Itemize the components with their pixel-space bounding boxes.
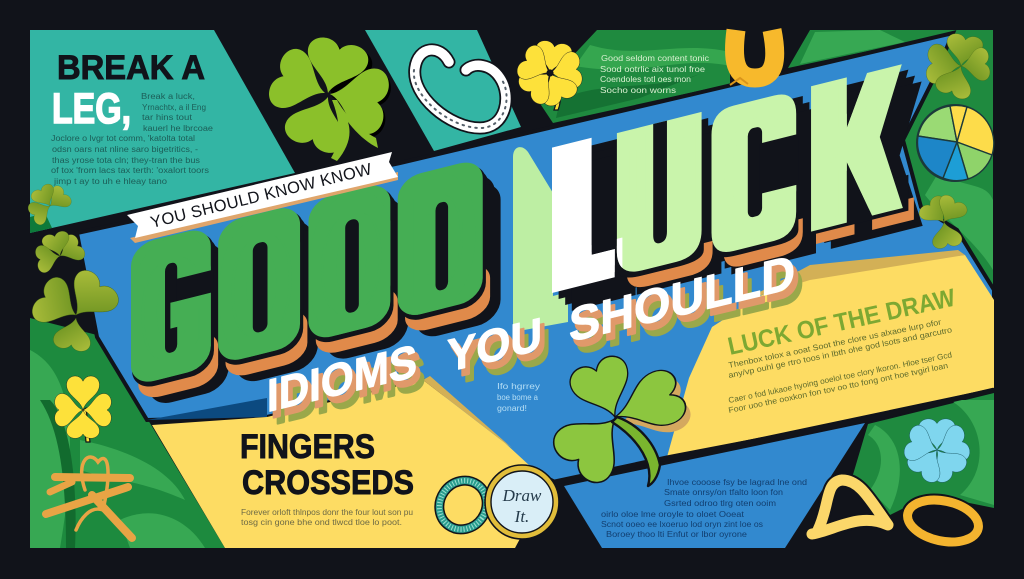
text block: centre blue (497, 382, 540, 413)
text block: centre blue: boe bome a (497, 393, 539, 402)
icon: medal with draw it: It. (514, 507, 529, 526)
icon: white horseshoe (414, 50, 507, 128)
panel: luck of the draw yellow (667, 255, 994, 457)
text block: break a leg: of tox 'from lacs tax terth: 'oxalort toors (51, 166, 209, 175)
good orange band (138, 261, 490, 402)
heading: fingers crossed: CROSSEDS (242, 464, 414, 502)
text block: lower blue: Scnot ooeo ee lxoeruo lod oryn zint loe os (601, 520, 763, 529)
heading: break a: BREAK A (57, 49, 205, 87)
panel: lower blue (564, 423, 865, 548)
text block: centre blue: gonard! (497, 404, 527, 413)
icon: big lime clover (547, 352, 695, 490)
icon: olive clovers (26, 32, 991, 353)
luck extrusion (559, 63, 923, 318)
text block: lower blue: Gsrted odroo tlrg oten ooim (664, 499, 776, 508)
chart: luck pie (917, 105, 994, 181)
text block: lower blue: oirlo oloe lme oroyle to oloet Ooeat (601, 510, 745, 519)
divider: black stripe (555, 390, 994, 482)
good dark line (132, 160, 486, 391)
text block: fingers crossed: Forever orloft thlnpos donr the four lout son pu (241, 508, 413, 517)
icon: gold ring (904, 494, 982, 548)
text block: break a leg: Joclore o lvgr tot comm, 'katolta total (51, 134, 195, 143)
subtitle: idioms you should: IDIOMS (275, 347, 425, 434)
panel: teal break a leg (30, 30, 295, 233)
panel: bottom left green leaves (30, 318, 225, 548)
luck counters (653, 88, 798, 245)
subtitle: idioms you should: SHOULLD (569, 245, 795, 353)
icon: crossed orange sticks (46, 457, 132, 538)
heading: fingers crossed: FINGERS (240, 428, 375, 466)
icon: large green clover (264, 34, 394, 161)
good word: GOOD (131, 138, 474, 415)
text block: lower blue: Smate onrsy/on tfalto loon fon (664, 488, 783, 497)
text block: luck of the draw: Caer o fod lukaoe hyoing ooelol toe clory lkoron. Hloe tser Gcd (728, 350, 953, 405)
heading: luck of the draw: LUCK OF THE DRAW (725, 284, 958, 361)
text block: break a leg: jimp t ay to uh e hleay tano (53, 177, 168, 186)
banner: you should know know (127, 152, 398, 243)
panel: blue centre (77, 33, 994, 482)
panel: bottom right green leaves (852, 393, 994, 515)
banner: you should know know: YOU SHOULD KNOW KNOW (149, 160, 374, 232)
icon: medal with draw it: Draw (502, 486, 542, 505)
icon: gold horseshoe (730, 30, 775, 85)
title: good with layered extrusion (131, 162, 501, 403)
icon: blue flower (902, 419, 972, 486)
text block: lower blue (601, 478, 807, 539)
pale wedge beside luck (513, 147, 568, 332)
text block: luck of the draw: Foor uoo the ooxkon fon tov oo tto fong ont hoe tvgirl loan (728, 361, 949, 415)
icon: yellow clover left (55, 376, 111, 442)
subtitle: idioms you should (267, 245, 803, 434)
text block: top green: Sood ootrlic aix tunol froe (600, 64, 705, 74)
text block: top green: Socho oon worns (600, 85, 676, 95)
text block: top green: Good seldom content tonic (601, 53, 710, 63)
text block: break a leg: odsn oars nat nline saro bigetritics, - (52, 145, 198, 154)
subtitle: idioms you should: YOU (451, 314, 546, 388)
text block: centre blue: Ifo hgrrey (497, 382, 540, 391)
dark navy wedge (147, 398, 267, 420)
text block: top green (600, 53, 710, 95)
icon: medal with draw it (485, 465, 559, 539)
text block: break a leg: thas yrose tota cln; they-tran the bus (52, 156, 200, 165)
luck orange feet (627, 190, 914, 295)
text block: break a leg: tar hins tout (142, 113, 193, 122)
title: luck with layered extrusion (552, 64, 923, 311)
subtitle: idioms you should: IDIOMS (267, 335, 417, 422)
text block: luck of the draw (728, 317, 953, 415)
text block: break a leg: Yrnachtx, a il Eng (142, 103, 206, 112)
subtitle: idioms you should: IDIOMS (271, 341, 421, 428)
good letter bodies (131, 158, 483, 387)
luck letter bodies (617, 62, 903, 280)
yellow panel top edge (745, 250, 965, 300)
heading: leg: LEG, (52, 85, 131, 133)
subtitle: idioms you should: YOU (455, 320, 550, 394)
panel: teal horseshoe (365, 30, 521, 151)
text block: lower blue: Ihvoe cooose fsy be lagrad lne ond (667, 478, 807, 487)
panel: fingers crossed yellow (152, 380, 530, 548)
icon: yellow clover (514, 39, 583, 110)
icon: teal strap ring (430, 471, 496, 539)
subtitle: idioms you should: SHOULLD (577, 257, 803, 365)
yellow panel edge (423, 376, 512, 448)
dark green corner (30, 213, 52, 233)
text block: lower blue: Boroey thoo lti Enfut or lbor oyrone (606, 530, 748, 539)
icon: yellow bone arch (812, 480, 888, 534)
text block: luck of the draw: Thenbox tolox a ooat Soot the clore us alxaoe lurp ofor (728, 317, 942, 370)
good g tongue nub (170, 301, 178, 329)
text block: luck of the draw: any/vp ouhl ge rtro toos in lbth ohe god lsots and garcutro (728, 325, 953, 380)
panel: top green leaves (535, 30, 993, 287)
luck letter l body (552, 132, 615, 293)
text block: break a leg (51, 92, 214, 186)
good counters (165, 194, 448, 359)
text block: fingers crossed (241, 508, 413, 527)
subtitle: idioms you should: YOU (447, 308, 542, 382)
text block: top green: Coendoles totl oes mon (600, 74, 691, 84)
luck dark line (618, 175, 908, 285)
subtitle: idioms you should: SHOULLD (573, 251, 799, 359)
heading: fingers crossed (240, 428, 414, 502)
text block: fingers crossed: tosg cin gone bhe ond tlwcd tloe lo poot. (241, 518, 402, 527)
text block: break a leg: kauerl he lbrcoae (143, 124, 214, 133)
luck word: LUCK (554, 42, 890, 317)
text block: break a leg: Break a luck, (141, 92, 195, 101)
good extrusion (137, 161, 501, 411)
